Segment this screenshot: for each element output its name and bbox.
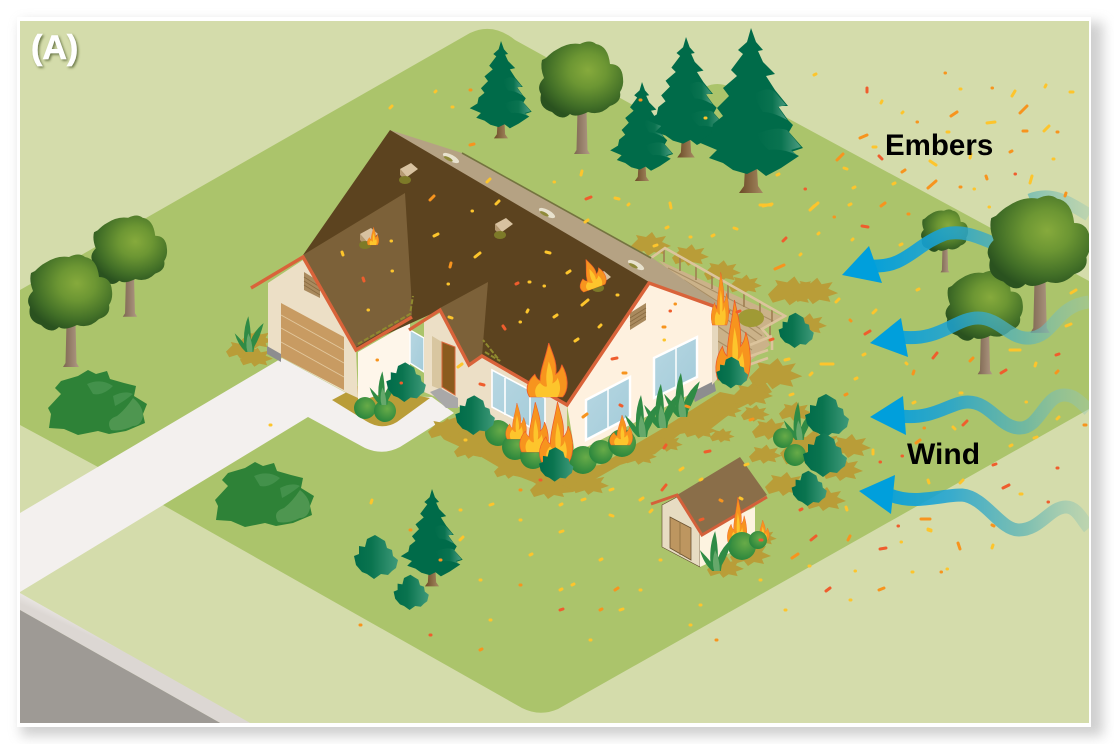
debris around house — [226, 232, 871, 578]
right window 2 — [654, 337, 697, 398]
wind arrow 1 — [842, 197, 1089, 283]
roof flame small — [367, 227, 379, 245]
label: Wind: Wind — [907, 438, 980, 471]
plant: garage — [235, 316, 264, 352]
embers: yellow — [270, 74, 1076, 640]
bush: left — [48, 370, 147, 435]
shed trim — [651, 495, 767, 535]
shrub: lower small — [394, 575, 429, 610]
right gable wall — [567, 283, 712, 453]
front window — [492, 370, 545, 435]
deck side wall — [712, 307, 718, 385]
porch step — [430, 388, 458, 408]
door — [442, 342, 455, 395]
vent with debris — [399, 163, 418, 184]
debris at garage planting — [226, 342, 256, 359]
wind arrow 3 — [870, 395, 1089, 435]
flames on deck — [711, 272, 750, 380]
ridge opening 2 — [537, 206, 556, 220]
debris at entry bed — [332, 385, 430, 426]
street curb — [20, 593, 252, 724]
flames at front of house — [506, 343, 633, 462]
garage vent — [304, 272, 320, 298]
garage door — [281, 303, 344, 390]
debris pile on deck — [738, 309, 764, 327]
right wall foundation — [694, 382, 716, 402]
roof trim — [251, 257, 730, 405]
entry shrubs — [354, 362, 426, 422]
right window 1 — [586, 377, 630, 440]
tree: small right — [921, 209, 968, 272]
garage wall — [268, 260, 358, 398]
tree: conifer left — [470, 41, 532, 138]
tree: conifer lower — [401, 489, 463, 586]
bush: lower — [215, 462, 314, 527]
wind arrow 4 — [859, 475, 1089, 530]
garage foundation — [267, 346, 281, 362]
house — [251, 130, 730, 455]
tree: large right — [988, 196, 1090, 333]
porch column — [432, 336, 442, 390]
shrub: lower left — [354, 535, 398, 579]
wind arrow 2 — [870, 302, 1089, 357]
foundation shrubs — [455, 395, 636, 474]
shrub at deck — [716, 357, 748, 388]
street — [20, 610, 222, 724]
shed — [651, 457, 769, 571]
tree: left rear — [28, 254, 112, 367]
ridge opening 1 — [441, 151, 460, 165]
front gable roof — [440, 282, 488, 365]
right vent — [630, 303, 646, 330]
shed side wall — [700, 507, 755, 567]
tree: tall conifer — [698, 28, 803, 193]
vent burning 2 — [592, 271, 611, 292]
shed flames — [727, 497, 769, 544]
shed shrubs — [728, 531, 767, 560]
gutter debris on ridge — [462, 153, 651, 258]
right hedge — [773, 394, 849, 506]
deck — [651, 248, 785, 375]
vent burning — [359, 228, 378, 249]
vent with debris 2 — [494, 218, 513, 239]
shrub at deck corner — [779, 313, 814, 348]
tree: middle right — [946, 271, 1023, 374]
debris at right hedge — [752, 418, 784, 440]
porch wall — [424, 313, 466, 410]
ridge opening 3 — [626, 258, 645, 272]
entry side wall — [358, 322, 410, 402]
embers: red — [363, 88, 1059, 635]
tree: left front — [91, 216, 167, 317]
tree: conifer middle — [610, 82, 673, 181]
shed gable wall — [662, 497, 700, 567]
tree: round top — [539, 42, 623, 154]
debris at shed — [707, 556, 744, 578]
moss in gutters — [358, 296, 500, 361]
tree: conifer right of middle — [653, 37, 720, 158]
roof back strip — [390, 130, 728, 310]
entry window — [410, 330, 424, 372]
main roof — [303, 130, 649, 404]
shed roof — [677, 457, 767, 535]
embers: orange — [360, 73, 1086, 650]
driveway — [20, 358, 454, 592]
front wall — [466, 357, 567, 455]
label: Embers: Embers — [885, 129, 993, 162]
roof flame large — [572, 255, 608, 293]
shed door — [670, 517, 691, 560]
debris behind deck — [630, 232, 671, 256]
shrub under flames — [539, 447, 573, 482]
left gable roof — [303, 193, 412, 347]
shed plant — [700, 531, 732, 571]
grasses — [625, 373, 700, 437]
label: panel letter: (A) — [31, 29, 78, 67]
window mullions — [505, 378, 530, 428]
